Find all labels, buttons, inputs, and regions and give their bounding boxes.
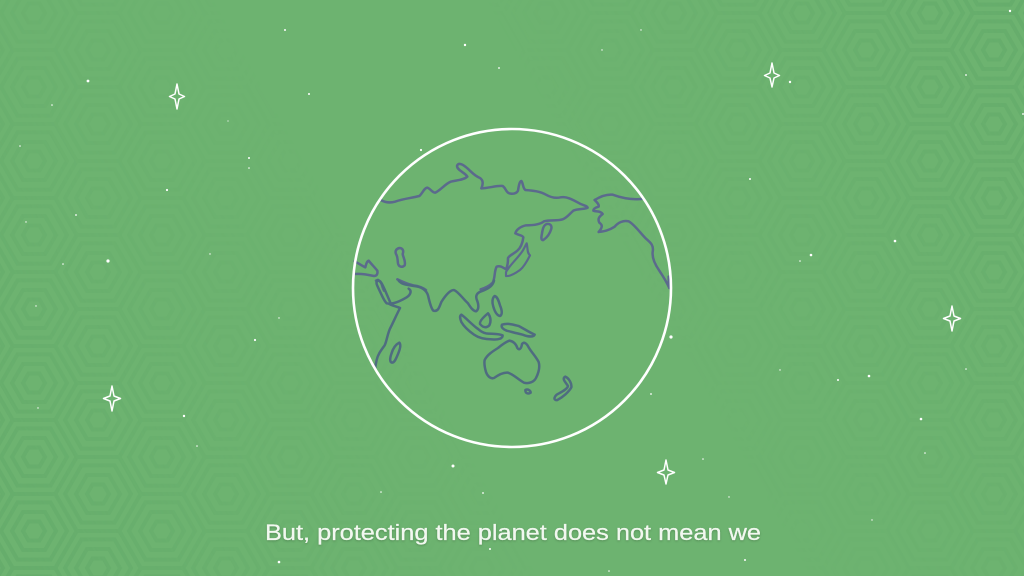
sparkle star 4 (104, 386, 120, 411)
sparkle star 5 (658, 460, 674, 484)
continents upper half (355, 164, 669, 291)
continents lower half (375, 280, 571, 400)
globe illustration (353, 129, 671, 447)
globe outline (353, 129, 671, 447)
sparkle star 2 (764, 63, 780, 87)
caption text: But, protecting the planet does not mean we (265, 520, 761, 545)
sparkle star 1 (170, 84, 184, 109)
sparkle star 3 (944, 306, 960, 331)
